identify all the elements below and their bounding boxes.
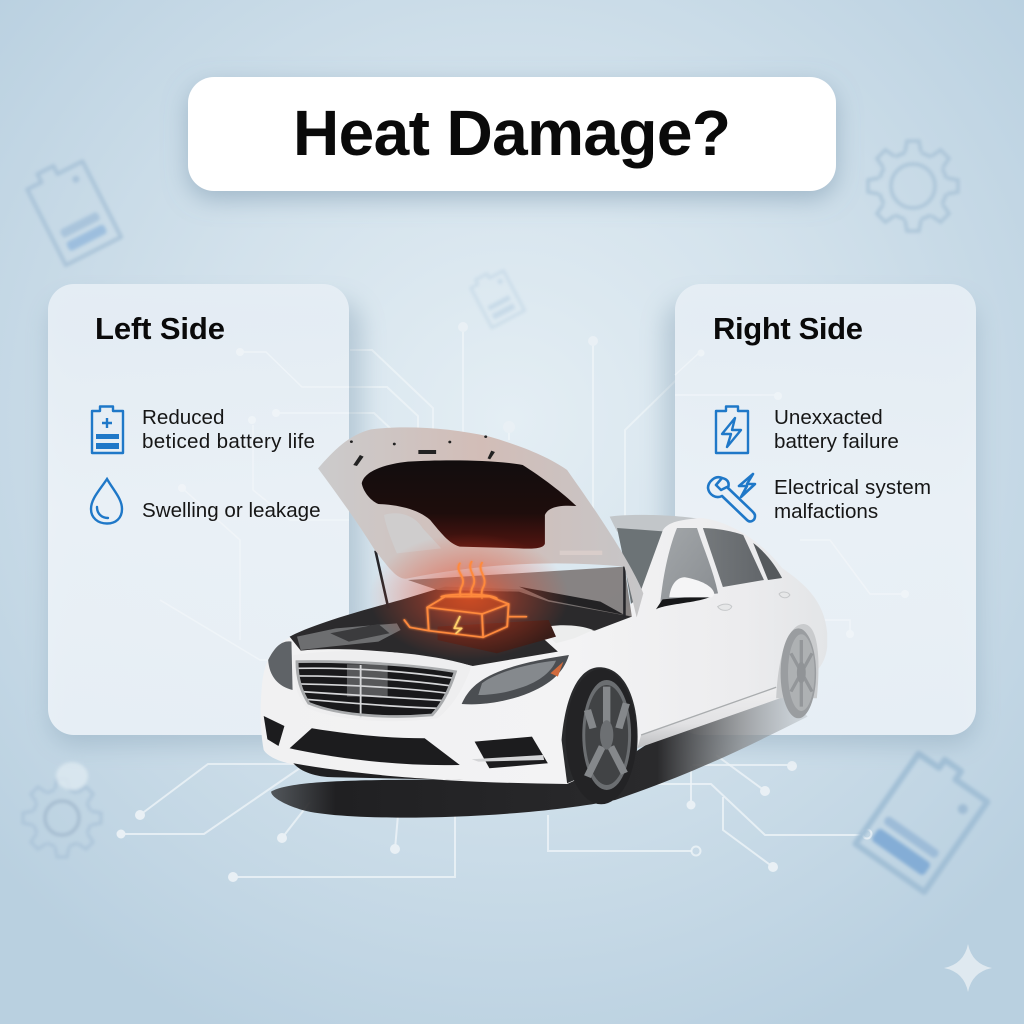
text: reduced battery life: beticed battery life [142, 430, 315, 453]
left fog vent [264, 716, 284, 746]
hood bolts [350, 435, 495, 466]
grille [297, 661, 455, 717]
front wheel [566, 669, 637, 804]
engine parts [297, 623, 401, 650]
right headlight [462, 655, 569, 704]
chin spoiler [293, 763, 464, 780]
open hood [318, 427, 643, 617]
windshield [617, 528, 663, 620]
text: reduced battery life: Reduced [142, 406, 224, 429]
icon: battery plus [92, 406, 123, 453]
title card [188, 77, 836, 191]
text: swelling or leakage: Swelling or leakage [142, 499, 321, 522]
car body [261, 518, 827, 784]
rear door window [703, 528, 764, 587]
hood struts [375, 551, 624, 617]
roof strip [610, 515, 698, 532]
hood lower panel detail [384, 513, 441, 553]
title: Heat Damage? [293, 97, 731, 169]
icon: faded battery bottom right [855, 745, 993, 892]
text: unexpected battery failure: Unexxacted [774, 406, 883, 429]
panel: right side [675, 284, 976, 735]
glowing battery [404, 562, 526, 637]
heading: left side: Left Side [95, 311, 225, 346]
left headlight [268, 641, 293, 690]
panel: left side [48, 284, 349, 735]
text: electrical system malfunctions [774, 476, 931, 523]
front door window [660, 528, 718, 607]
icon: sparkle [944, 944, 992, 992]
heading: right side: Right Side [713, 311, 863, 346]
icon: faded gear bottom left [23, 762, 101, 857]
side sill shading [637, 687, 780, 748]
hood insulation [362, 460, 576, 549]
panel shadows [50, 300, 976, 745]
front wheel arch [562, 667, 638, 783]
heat waves [458, 562, 485, 598]
icon: battery bolt [716, 406, 748, 453]
front fascia [293, 651, 472, 721]
engine bay [290, 587, 632, 666]
text: unexpected battery failure: battery failure [774, 430, 899, 453]
rear quarter window [753, 543, 782, 580]
text: electrical system malfunctions: malfactions [774, 500, 878, 523]
rear wheel [776, 624, 818, 718]
ground shadow [271, 693, 808, 818]
lower center vent [290, 728, 460, 765]
illustration: white car with open hood [261, 427, 827, 818]
icon: wrench and bolt [708, 474, 755, 521]
side mirror [656, 577, 714, 609]
circuit lines behind panels [116, 322, 872, 882]
text: electrical system malfunctions: Electrical system [774, 476, 931, 499]
door handles [718, 592, 790, 610]
right fog vent [472, 737, 548, 768]
icon: faded small battery [468, 266, 525, 328]
heat glow [369, 533, 569, 660]
icon: water drop [91, 479, 122, 524]
under hood glass [408, 567, 632, 617]
icon: faded battery top left [23, 153, 121, 265]
icon: faded gear top right [868, 141, 958, 231]
text: reduced battery life [142, 406, 315, 453]
